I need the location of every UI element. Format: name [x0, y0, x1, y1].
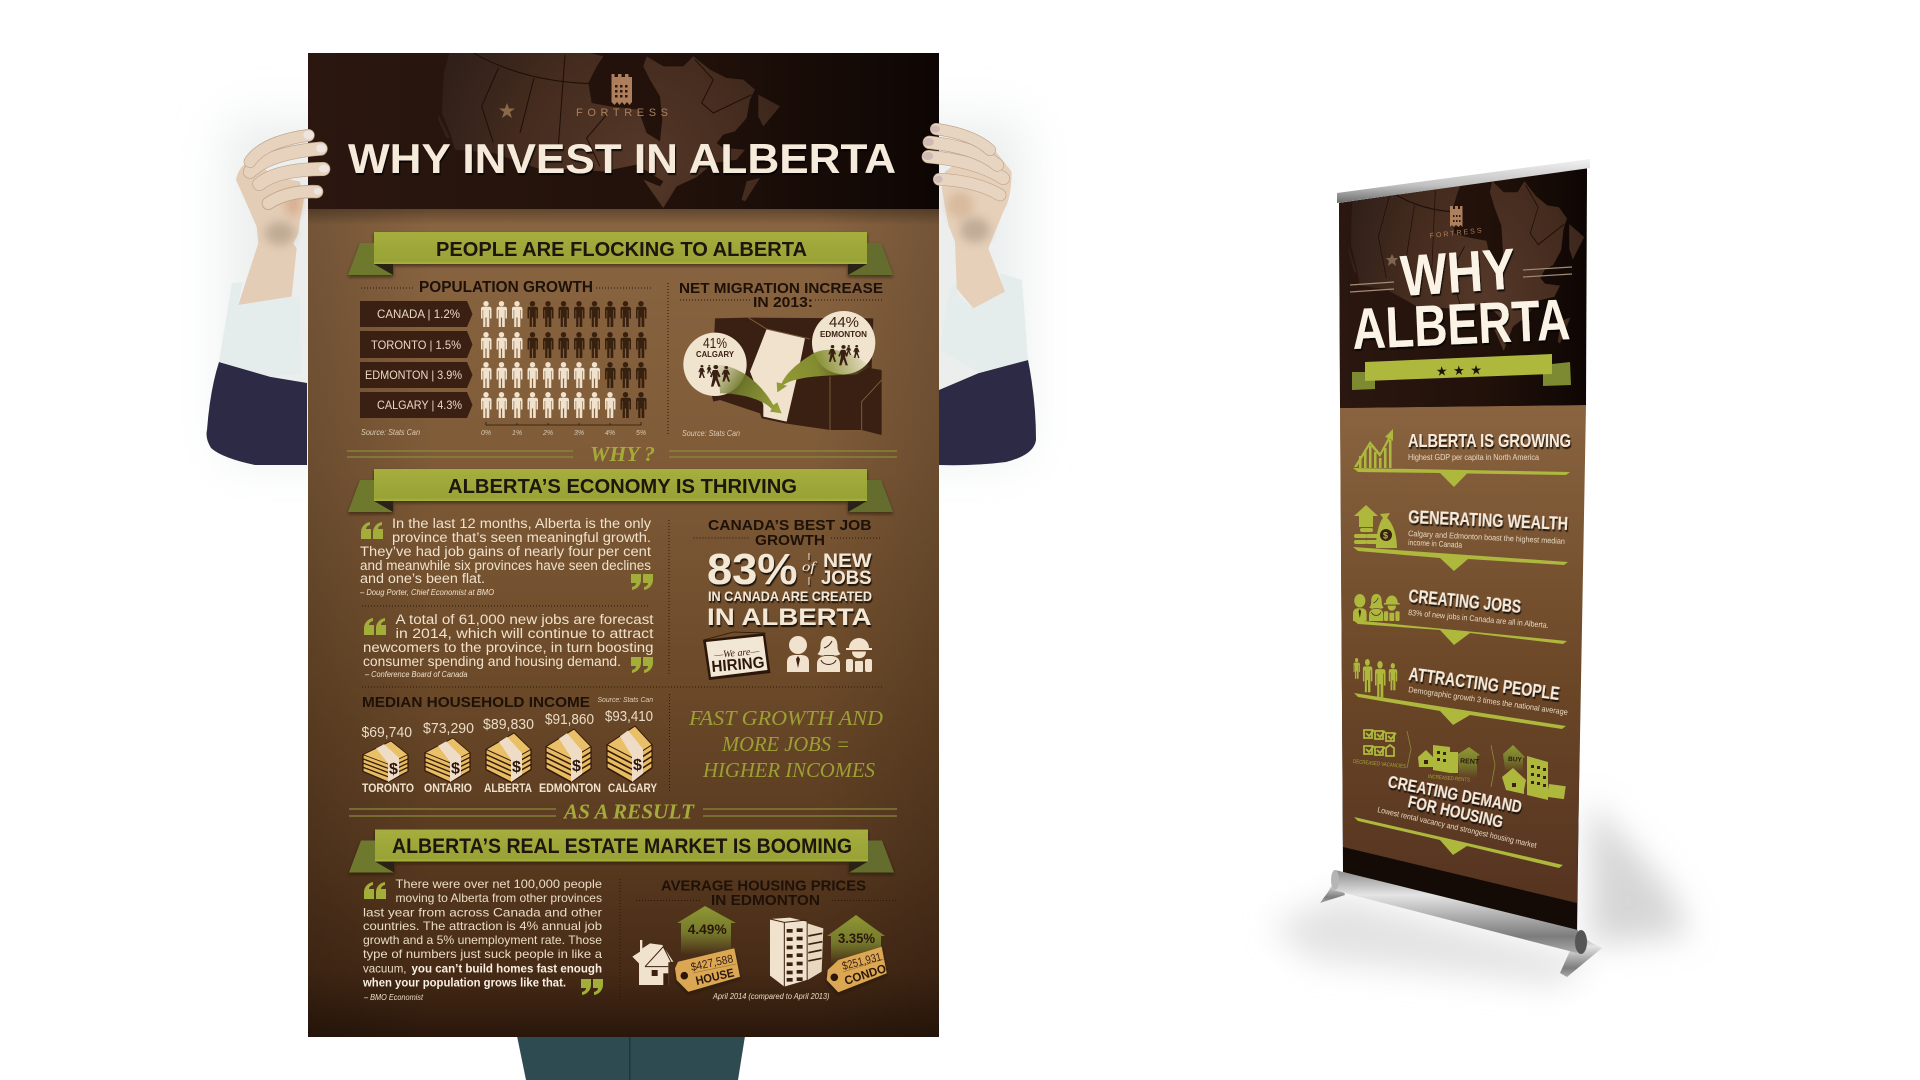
section banner: real estate	[349, 830, 894, 872]
banner item: creating demand for housing: CREATING DEMAND	[1386, 771, 1524, 817]
icon: four people	[1354, 658, 1397, 697]
banner header	[1339, 168, 1587, 408]
banner top rail	[1337, 159, 1590, 203]
heading: net migration: IN 2013:	[753, 294, 813, 311]
icon: money stacks: $	[389, 761, 398, 778]
map of western Canada	[712, 318, 882, 435]
row labels: EDMONTON | 3.9%	[365, 368, 462, 382]
banner item: creating jobs: CREATING JOBS	[1408, 586, 1522, 617]
city labels: ONTARIO	[424, 783, 472, 795]
banner item: attracting people	[1354, 658, 1569, 729]
footnote: April 2014 (compared to April 2013)	[712, 992, 830, 1001]
condo price up arrow: 3.35%	[838, 930, 876, 946]
title: WHY INVEST IN ALBERTA	[348, 135, 896, 182]
price tag: condo	[827, 947, 888, 992]
quote: BMO economist: when your population grows like that.	[362, 976, 566, 990]
icon: money stacks: $	[572, 758, 581, 775]
wrist and palm	[236, 160, 304, 305]
city labels	[362, 783, 657, 795]
heading: CANADA’S BEST JOB	[708, 517, 872, 534]
panel: net migration	[679, 280, 883, 438]
axis: 2%	[542, 430, 553, 437]
edmonton label	[820, 314, 867, 339]
stat: 83 percent: JOBS	[821, 568, 872, 589]
person: jeans below poster	[517, 1036, 745, 1080]
quote: Conference Board: A total of 61,000 new jobs are forecast	[396, 612, 654, 627]
income values: $89,830	[483, 717, 534, 733]
edmonton label: 44%	[829, 314, 859, 331]
pictogram: calgary 4.3%	[481, 392, 646, 418]
panel: best job growth	[694, 517, 882, 680]
quote: Doug Porter: and one’s been flat.	[360, 571, 485, 586]
banner star	[1386, 254, 1398, 266]
person: left hand	[236, 131, 329, 305]
source note: Source: Stats Can	[361, 428, 421, 437]
quote: Doug Porter	[359, 516, 653, 597]
calgary bubble	[683, 333, 747, 396]
house price up arrow: 4.49%	[688, 921, 727, 937]
heading: net migration	[679, 280, 883, 311]
source note: Source: Stats Can	[682, 429, 740, 438]
stat: 83 percent: NEW	[823, 551, 872, 572]
callout: fast growth: MORE JOBS =	[721, 732, 850, 756]
quote: Doug Porter: They’ve had job gains of nearly four per cent	[360, 544, 651, 559]
calgary label	[696, 335, 735, 359]
quote: BMO economist: growth and a 5% unemployment rate. Those	[363, 933, 602, 947]
icon: money stacks: $	[512, 759, 521, 776]
banner item: creating demand for housing	[1353, 730, 1566, 868]
row labels: CALGARY | 4.3%	[377, 398, 462, 412]
city labels: ALBERTA	[484, 783, 532, 795]
icon: coins and money bag	[1354, 505, 1397, 548]
quote: Conference Board: consumer spending and housing demand.	[363, 654, 621, 669]
axis	[481, 422, 646, 437]
pictogram: canada 1.2%	[481, 301, 646, 327]
banner logo: FORTRESS	[1429, 228, 1482, 240]
icon: hiring sign: HIRING	[711, 654, 765, 676]
pictogram: toronto 1.5%	[481, 332, 646, 358]
quote: BMO economist	[362, 877, 603, 1002]
soft glow behind poster	[225, 120, 1025, 460]
banner title	[1351, 236, 1571, 362]
banner ribbon: ★ ★ ★	[1436, 362, 1482, 379]
logo: fortress tower	[611, 74, 632, 105]
income values: $93,410	[605, 709, 653, 725]
section banner: people are flocking: PEOPLE ARE FLOCKING TO ALBERTA	[436, 239, 807, 261]
quote: BMO economist: – BMO Economist	[363, 993, 424, 1002]
icon: edmonton walkers	[828, 345, 860, 365]
house price up arrow	[677, 906, 736, 955]
icon: vacancy checkboxes	[1364, 730, 1396, 756]
quote: BMO economist: countries. The attraction is 4% annual job	[363, 919, 602, 933]
axis: 1%	[512, 430, 522, 437]
fingers	[250, 135, 323, 203]
row labels	[360, 301, 472, 418]
calgary arrow	[713, 365, 782, 413]
quote: BMO economist: last year from across Canada and other	[363, 906, 602, 920]
city labels: TORONTO	[362, 783, 414, 795]
banner item: generating wealth: GENERATING WEALTH	[1408, 507, 1569, 534]
banner stand feet	[1320, 875, 1602, 977]
icon: money stacks	[363, 726, 652, 782]
income values: $91,860	[545, 712, 594, 728]
icon: calgary walkers	[698, 365, 730, 387]
header map of Canada	[438, 53, 780, 208]
stat: 83 percent: IN ALBERTA	[707, 604, 872, 631]
axis: 5%	[636, 430, 646, 437]
callout: fast growth: FAST GROWTH AND	[688, 706, 883, 730]
banner map	[1348, 177, 1584, 351]
icon: buy house and condo: BUY	[1508, 756, 1523, 764]
divider: why: WHY ?	[590, 442, 655, 466]
heading: IN EDMONTON	[711, 892, 820, 909]
banner ribbon	[1352, 354, 1571, 390]
banner item: creating jobs: 83% of new jobs in Canada are all in Alberta.	[1408, 608, 1549, 630]
banner item: creating demand for housing: INCREASED RENTS	[1428, 774, 1470, 784]
icon: three workers	[787, 636, 872, 672]
panel: median household income	[362, 694, 657, 795]
section banner: economy thriving	[348, 469, 893, 512]
callout: fast growth: HIGHER INCOMES	[702, 758, 875, 782]
axis: 3%	[574, 430, 584, 437]
divider: why	[347, 442, 897, 466]
banner item: attracting people: ATTRACTING PEOPLE	[1407, 664, 1561, 704]
section banner: people are flocking	[348, 232, 893, 275]
stat: 83 percent: IN CANADA ARE CREATED	[708, 588, 872, 604]
axis: 4%	[605, 430, 615, 437]
edmonton arrow	[777, 350, 870, 392]
stat: 83 percent: 83%	[707, 545, 798, 594]
quote: BMO economist: vacuum,	[363, 962, 406, 976]
banner item: attracting people: Demographic growth 3 times the national average	[1408, 685, 1569, 717]
banner logo	[1429, 206, 1482, 240]
heading: MEDIAN HOUSEHOLD INCOME	[362, 694, 590, 711]
stat: 83 percent: of	[802, 560, 818, 575]
calgary label: CALGARY	[696, 350, 735, 359]
quote: BMO economist: There were over net 100,000 people	[396, 877, 602, 891]
price tag: house: HOUSE	[694, 966, 735, 988]
finger nails	[303, 131, 329, 195]
roll-up banner	[1320, 159, 1602, 977]
icon: money stacks: $	[633, 757, 642, 774]
condo price up arrow	[827, 915, 885, 965]
income values: $73,290	[423, 721, 474, 737]
banner title: ALBERTA	[1351, 287, 1571, 362]
price tag: condo: CONDO	[843, 961, 888, 988]
divider: as a result: AS A RESULT	[562, 800, 695, 824]
icon: condo building	[770, 918, 823, 987]
banner base roller	[1331, 870, 1587, 954]
banner panel	[1339, 168, 1587, 935]
source note: Source: Stats Can	[598, 697, 653, 704]
banner item: creating jobs	[1353, 586, 1567, 645]
quote: Doug Porter: In the last 12 months, Alberta is the only	[392, 516, 651, 531]
banner title: WHY	[1399, 236, 1518, 309]
quote: Conference Board	[363, 612, 654, 679]
chart: migration map	[683, 311, 882, 435]
banner item: creating demand for housing: FOR HOUSING	[1406, 791, 1505, 832]
banner item: creating demand for housing: DECREASED VACANCIES	[1353, 759, 1406, 770]
icon: rental buildings: RENT	[1460, 758, 1480, 766]
quote: Conference Board: – Conference Board of Canada	[364, 670, 468, 679]
soft shadows behind roll-up banner	[1270, 800, 1690, 985]
price tag: house	[675, 948, 740, 992]
heading	[708, 517, 872, 549]
heading: population growth: POPULATION GROWTH	[419, 279, 593, 296]
row labels: CANADA | 1.2%	[377, 307, 460, 321]
callout: fast growth	[688, 706, 883, 782]
banner item: generating wealth: Calgary and Edmonton boast the highest median	[1408, 529, 1565, 546]
heading	[661, 878, 866, 909]
icon: hiring sign	[703, 632, 770, 680]
banner item: creating demand for housing: Lowest rental vacancy and strongest housing market	[1377, 805, 1538, 850]
quote: BMO economist: moving to Alberta from other provinces	[396, 891, 602, 905]
icon: buy house and condo	[1502, 745, 1566, 800]
quote: Conference Board: in 2014, which will continue to attract	[396, 626, 654, 641]
section banner: real estate: ALBERTA’S REAL ESTATE MARKET IS BOOMING	[392, 835, 852, 858]
banner item: generating wealth: income in Canada	[1408, 538, 1463, 550]
person: right sleeve	[939, 360, 1036, 465]
income values	[362, 709, 653, 741]
heading: GROWTH	[755, 532, 825, 549]
heading: net migration: NET MIGRATION INCREASE	[679, 280, 883, 297]
icon: coins and money bag: $	[1383, 530, 1388, 540]
icon: house	[632, 940, 673, 985]
quote: Conference Board: newcomers to the province, in turn boosting	[363, 640, 654, 655]
quote: BMO economist: you can’t build homes fast enough	[412, 962, 602, 976]
heading: AVERAGE HOUSING PRICES	[661, 878, 866, 894]
finger nails	[923, 125, 943, 183]
quote: Doug Porter: and meanwhile six provinces have seen declines	[360, 558, 651, 573]
quote: BMO economist: type of numbers just suck people in like a	[363, 947, 602, 961]
city labels: CALGARY	[608, 783, 657, 795]
icon: rental buildings	[1418, 745, 1480, 778]
poster brown background	[308, 209, 939, 1037]
wrist and palm	[942, 140, 1012, 308]
stat: 83 percent	[707, 545, 872, 631]
banner item: generating wealth	[1353, 505, 1569, 571]
panel: population growth	[360, 279, 651, 437]
icon: three workers	[1353, 594, 1400, 621]
price tag: condo: $251,931	[841, 951, 883, 973]
section banner: economy thriving: ALBERTA’S ECONOMY IS THRIVING	[448, 476, 797, 498]
pictogram: edmonton 3.9%	[481, 362, 646, 388]
banner item: alberta is growing: Highest GDP per capita in North America	[1408, 453, 1539, 462]
row labels: TORONTO | 1.5%	[371, 338, 461, 352]
quote: Doug Porter: – Doug Porter, Chief Economist at BMO	[359, 588, 494, 597]
divider: as a result	[349, 800, 897, 824]
poster header	[308, 53, 939, 209]
income values: $69,740	[362, 725, 412, 741]
quote: Doug Porter: province that’s seen meaningful growth.	[392, 530, 651, 545]
banner item: alberta is growing: ALBERTA IS GROWING	[1408, 431, 1571, 451]
edmonton label: EDMONTON	[820, 330, 867, 339]
price tag: house: $427,588	[690, 953, 734, 974]
edmonton bubble	[812, 311, 875, 374]
axis: 0%	[481, 430, 491, 437]
panel: average housing prices	[632, 878, 897, 1001]
map star	[499, 103, 515, 118]
icon: hiring sign: —We are—	[713, 646, 760, 661]
person: left sleeve	[206, 362, 307, 465]
icon: growth chart	[1354, 429, 1393, 468]
fingers	[928, 129, 1003, 195]
poster	[308, 53, 939, 1037]
banner item: alberta is growing	[1353, 429, 1571, 487]
calgary label: 41%	[703, 335, 727, 352]
banner brown field	[1340, 405, 1586, 903]
person: right hand	[923, 125, 1012, 308]
icon: money stacks: $	[451, 760, 460, 778]
person: left cuff	[219, 282, 301, 377]
person: right cuff	[940, 273, 1028, 373]
logo wordmark: FORTRESS	[576, 107, 668, 119]
city labels: EDMONTON	[539, 783, 601, 795]
